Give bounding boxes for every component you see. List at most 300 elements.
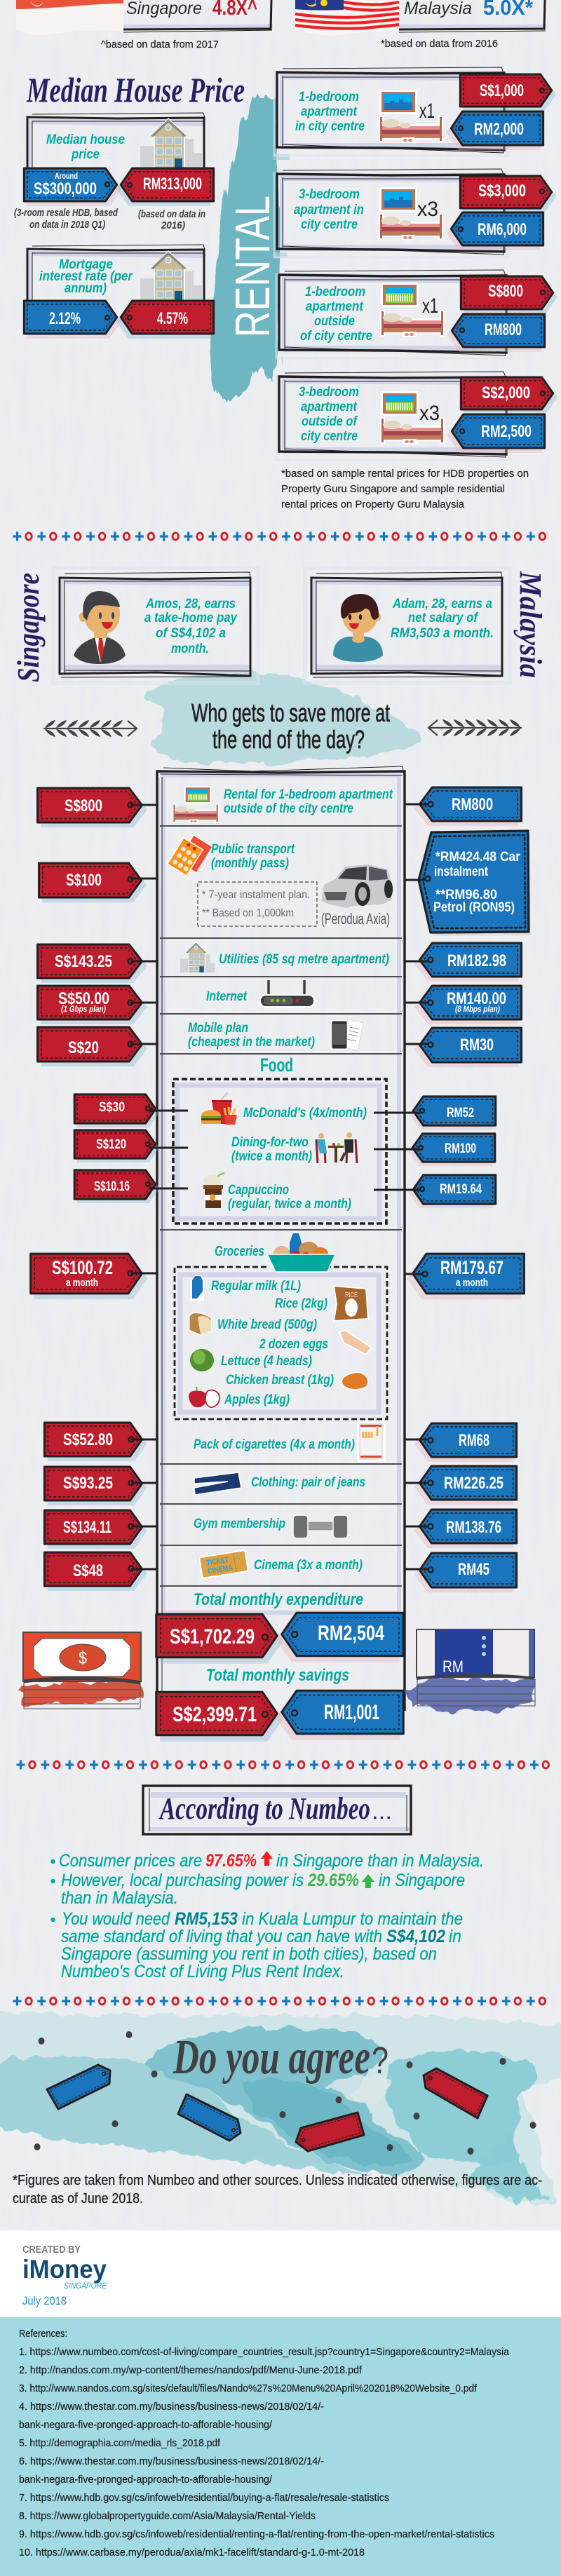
note: HDB source: (3-room resale HDB, based (14, 207, 119, 219)
text: Amos salary (144, 597, 238, 656)
label: Mortgage (59, 257, 113, 272)
text: cappuccino (228, 1183, 351, 1212)
icon: Amos avatar (74, 591, 126, 664)
icon: red tag one (296, 2113, 364, 2151)
label: Median house (46, 133, 125, 147)
tag: Malaysia rate (116, 301, 214, 339)
label: in city centre (295, 119, 365, 134)
tag: Malaysia rent (447, 414, 545, 453)
tag: S$143.25 (38, 944, 156, 983)
tag: RM226.25 (405, 1466, 517, 1505)
heading: do you agree: Do you agree (173, 2031, 370, 2084)
tag: S$100.72: a month (66, 1277, 98, 1289)
panel: references: 1. https://www.numbeo.com/cost-of-living/compare_countries_result.jsp?country1=Singapore&country2=Malaysia (19, 2346, 510, 2358)
tag: S$93.25 (44, 1467, 156, 1505)
tag: Singapore total expenditure (156, 1614, 283, 1664)
heading: rental: RENTAL (225, 196, 280, 337)
tag: S$800: S$800 (65, 796, 102, 815)
label: outside (314, 314, 355, 329)
tag: Malaysia rent (447, 111, 543, 150)
tag: Singapore rent: S$3,000 (478, 182, 526, 201)
bullet 2 (50, 1871, 465, 1908)
panel: references: bank-negara-five-pronged-approach-to-afforable-housing/ (19, 2419, 273, 2431)
item: apples (189, 1387, 290, 1407)
row: cinema (44, 1550, 517, 1592)
bullet 3: same standard of living that you can have with (61, 1927, 382, 1946)
icon: window and bed (380, 391, 445, 445)
note box: instalment and petrol basis: * 7-year instalment plan. (202, 889, 310, 901)
tag: RM138.76: RM138.76 (446, 1518, 501, 1537)
row: internet (38, 980, 522, 1024)
icon: window and bed (379, 90, 443, 143)
tag: RM100: RM100 (445, 1141, 476, 1156)
tag: RM19.64 (374, 1175, 496, 1208)
label (299, 385, 359, 444)
panel: references (0, 2317, 561, 2576)
panel: references: 4. https://www.thestar.com.my/business/business-news/2018/02/14/- (19, 2401, 324, 2413)
panel: references: References: (19, 2328, 67, 2340)
icon: Singapore banknote and wallet: $ (79, 1648, 87, 1668)
tag: S$10.16: S$10.16 (94, 1179, 130, 1194)
credit: created by iMoney: July 2018 (22, 2294, 67, 2307)
tag: Singapore price: Around (55, 171, 78, 181)
label: apartment in (294, 203, 364, 217)
item: eggs (259, 1330, 372, 1355)
row: cappuccino (74, 1170, 496, 1212)
label (295, 90, 365, 134)
icon: window and bed (380, 283, 445, 337)
row: mobile plan (38, 1019, 522, 1067)
tag: RM19.64: RM19.64 (440, 1182, 482, 1197)
text: utilities: Utilities (85 sq metre apartment) (219, 952, 389, 967)
tag: S$30: S$30 (99, 1100, 125, 1115)
note: HDB source (14, 207, 119, 231)
footnote: curate as of June 2018. (13, 2191, 143, 2206)
bullet 2: in Singapore (379, 1871, 465, 1890)
panel: food items (74, 1079, 496, 1223)
item: bread: White bread (500g) (217, 1317, 317, 1332)
icon: house (140, 250, 202, 301)
tag: S$134.11: S$134.11 (63, 1518, 111, 1537)
tag: Malaysia price (116, 168, 214, 206)
text: cigarettes: Pack of cigarettes (4x a month) (194, 1437, 355, 1452)
text: public transport (211, 842, 295, 871)
tag: S$48: S$48 (73, 1561, 103, 1580)
tag: Singapore price: S$300,000 (34, 179, 97, 198)
panel: references: 2. http://nandos.com.my/wp-content/themes/nandos/pdf/Menu-June-2018.pdf (19, 2364, 363, 2376)
tag: Singapore rent (461, 377, 557, 414)
tag: S$52.80: S$52.80 (63, 1430, 113, 1449)
note: Malaysia source (138, 208, 205, 231)
tag: Singapore rate (24, 301, 121, 339)
bullet 3 (50, 1909, 463, 1981)
panel: Adam (305, 568, 510, 683)
text: rental: outside of the city centre (224, 801, 353, 816)
icon: car (321, 865, 393, 908)
tag: Malaysia total savings: RM1,001 (324, 1701, 379, 1724)
tag: RM800 (405, 787, 522, 826)
row: cigarettes (44, 1421, 517, 1462)
tag: Malaysia rent: RM2,500 (481, 422, 532, 441)
text: rental: Rental for 1-bedroom apartment (224, 787, 393, 802)
text: jeans: Clothing: pair of jeans (251, 1475, 365, 1490)
note box: instalment and petrol basis (198, 882, 317, 926)
panel: references: 10. https://www.carbase.my/perodua/axia/mk1-facelift/standard-g-1.0-mt-2018 (19, 2547, 365, 2558)
decorative teal blob behind question (145, 672, 419, 764)
label: price (71, 147, 100, 162)
tag: Singapore rate: 2.12% (49, 309, 81, 328)
icon: fast food (201, 1092, 237, 1125)
tag: Malaysia total expenditure: RM2,504 (318, 1622, 384, 1645)
tag: RM138.76 (405, 1510, 517, 1548)
heading: do you agree: ? (372, 2040, 388, 2082)
panel: references: 8. https://www.globalpropertyguide.com/Asia/Malaysia/Rental-Yields (19, 2510, 316, 2522)
icon: left laurel arrow (43, 720, 137, 737)
panel: Singapore price-to-income (16, 0, 272, 35)
credit: created by iMoney (22, 2244, 107, 2307)
tag: RM179.67: a month (456, 1277, 488, 1289)
icon: cigarette pack (357, 1421, 386, 1462)
tag: Singapore rent (461, 276, 557, 314)
label (39, 257, 133, 296)
note: Malaysia source: 2016) (161, 219, 185, 231)
label: apartment (306, 299, 364, 314)
caption: car model: (Perodua Axia) (321, 910, 390, 928)
tag: car and petrol: instalment (434, 865, 489, 879)
tag: S$48 (44, 1552, 156, 1591)
text: Amos salary: of S$4,102 a (156, 626, 226, 641)
tag: Singapore rent (460, 176, 556, 213)
bullet 1: 97.65% (205, 1851, 257, 1871)
icon: dumbbell (293, 1515, 348, 1538)
panel: references: 6. https://www.thestar.com.my/business/business-news/2018/02/14/- (19, 2455, 324, 2467)
text: Adam salary: RM3,503 a month. (391, 626, 494, 641)
tag: Singapore rent: S$2,000 (482, 384, 530, 402)
tag: RM45: RM45 (458, 1560, 489, 1579)
tag: RM182.98 (405, 943, 522, 982)
bullet 1 (50, 1851, 484, 1871)
icon: cinema ticket: CINEMA (207, 1564, 234, 1576)
tag: RM68: RM68 (459, 1431, 489, 1450)
icon: coffee cup (203, 1173, 224, 1208)
note: rental sources: Property Guru Singapore and sample residential (281, 483, 505, 495)
heading: median house price: Median House Price (26, 70, 245, 109)
icon: Singapore banknote and wallet (15, 1632, 144, 1709)
tag: S$50.00: (1 Gbps plan) (61, 1004, 106, 1014)
panel: main comparison column (157, 766, 405, 1711)
label: 1-bedroom (299, 90, 359, 104)
icon: grocery basket (267, 1233, 335, 1272)
divider pattern (16, 1758, 551, 1772)
tag: S$100.72: S$100.72 (52, 1257, 113, 1278)
row: utilities (38, 942, 522, 983)
label: annum) (65, 281, 107, 296)
row dividers (160, 826, 402, 1586)
tag: S$30 (74, 1094, 188, 1127)
tag: Malaysia rent: RM800 (485, 320, 522, 339)
panel: references: bank-negara-five-pronged-approach-to-afforable-housing/ (19, 2474, 273, 2486)
tag: Malaysia total savings (276, 1690, 403, 1740)
text: Amos salary: Amos, 28, earns (145, 597, 236, 611)
icon: blue tag two (178, 2094, 241, 2141)
tag: Malaysia rent (447, 212, 543, 250)
note: HDB source: on data in 2018 Q1) (29, 219, 105, 231)
panel: Malaysia price-to-income (295, 0, 546, 36)
text: Amos salary: month. (171, 642, 209, 656)
tag: S$50.00: S$50.00 (58, 989, 109, 1008)
tag: S$20 (38, 1027, 156, 1066)
tag: Malaysia price: RM313,000 (143, 175, 202, 194)
icon: phone and bill (332, 1019, 363, 1050)
icon: cinema ticket: TICKET (206, 1556, 229, 1568)
note: Malaysia data year: *based on data from 2016 (381, 38, 498, 50)
tag: RM179.67: RM179.67 (440, 1257, 503, 1278)
heading: total monthly savings: Total monthly savings (206, 1666, 349, 1685)
tag: RM100 (374, 1134, 495, 1166)
text: cappuccino: (regular, twice a month) (228, 1197, 351, 1212)
heading: food: Food (260, 1055, 293, 1076)
heading: who gets to save more: the end of the day? (212, 725, 365, 754)
tag: S$800 (38, 788, 156, 827)
tag: S$52.80 (44, 1423, 156, 1461)
panel: references: 3. http://www.nandos.com.sg/sites/default/files/Nando%27s%20Menu%20April%202018%20Website_0.pdf (19, 2382, 478, 2394)
icon: window and bed (173, 786, 219, 823)
tag: RM52 (374, 1097, 496, 1130)
decorative watercolour band (0, 2011, 561, 2202)
panel: references: 9. https://www.hdb.gov.sg/cs/infoweb/residential/renting-a-flat/renting-from-the-open-market/rental-statistics (19, 2528, 494, 2540)
text: rental (224, 787, 393, 816)
tag: Singapore rent: S$800 (488, 282, 523, 301)
tag: S$100 (39, 863, 156, 902)
heading box: According to Numbeo: ... (372, 1801, 392, 1824)
tag: RM800: RM800 (452, 795, 493, 814)
text: dining-for-two: Dining-for-two (231, 1135, 309, 1150)
heading: total monthly expenditure: Total monthly expenditure (194, 1590, 363, 1609)
text block: Numbeo findings (50, 1851, 484, 1981)
bullet 2: than in Malaysia. (61, 1888, 178, 1908)
decorative dots (34, 2031, 536, 2155)
tag: Singapore price (24, 168, 121, 206)
tag: S$120 (74, 1130, 188, 1162)
tag: RM68 (405, 1423, 517, 1462)
heading: who gets to save more: Who gets to save more at (191, 698, 390, 727)
label: interest rate (per (39, 269, 133, 284)
credit: created by iMoney: CREATED BY (22, 2244, 81, 2256)
text: Amos salary: a take-home pay (144, 611, 238, 625)
text: dining-for-two: (twice a month) (231, 1149, 312, 1164)
panel: Amos (53, 568, 258, 683)
label: apartment (301, 104, 358, 119)
row: dining-for-two (74, 1130, 495, 1166)
bullet 3: in Kuala Lumpur to maintain the (242, 1909, 463, 1929)
label: of city centre (300, 329, 372, 344)
bullet 3: in (449, 1927, 461, 1946)
item: eggs: 2 dozen eggs (259, 1337, 328, 1352)
note: rental sources (281, 468, 529, 510)
label: outside of (302, 414, 358, 429)
text: cinema: Cinema (3x a month) (254, 1558, 363, 1573)
bullet 3: Singapore (assuming you rent in both cities), based on (61, 1944, 437, 1964)
note: rental sources: *based on sample rental prices for HDB properties on (281, 468, 529, 480)
label (300, 285, 372, 344)
heading: who gets to save more (191, 698, 390, 754)
panel: rental 3-bedroom city (274, 169, 556, 257)
icon: diners (316, 1132, 357, 1163)
bullet 2: 29.65% (307, 1871, 359, 1890)
tag: S$50.00 (38, 986, 156, 1024)
text: Adam salary: Adam, 28, earns a (392, 597, 492, 611)
tag: S$10.16 (74, 1170, 188, 1203)
icon: blue tag one (47, 2065, 110, 2109)
icon: router (259, 980, 316, 1008)
bullet 1: in Singapore than in Malaysia. (276, 1851, 484, 1871)
bullet 2: However, local purchasing power is (61, 1871, 304, 1890)
text: mobile plan (188, 1021, 315, 1050)
row: jeans (44, 1466, 517, 1505)
tag: Malaysia total expenditure (276, 1613, 403, 1662)
label: Singapore vertical: Singapore (11, 573, 46, 682)
row: public transport (39, 831, 531, 936)
text: Adam salary (391, 597, 494, 641)
icon: transport tickets (168, 835, 212, 876)
divider pattern (13, 529, 548, 543)
tag: RM45 (405, 1553, 517, 1592)
text: mobile plan: (cheapest in the market) (188, 1035, 315, 1050)
panel: references: 7. https://www.hdb.gov.sg/cs/infoweb/residential/buying-a-flat/resale/resale-statistics (19, 2492, 389, 2504)
text: McDonald's: McDonald's (4x/month) (243, 1106, 367, 1120)
label: Malaysia vertical: Malaysia (513, 571, 548, 678)
divider pattern (13, 1994, 548, 2008)
bullet 3: RM5,153 (175, 1909, 238, 1929)
item: lettuce (190, 1349, 312, 1371)
icon: red tag two (424, 2068, 487, 2118)
item: lettuce: Lettuce (4 heads) (221, 1354, 312, 1369)
text: mobile plan: Mobile plan (188, 1021, 248, 1036)
label: 3-bedroom (299, 187, 360, 202)
tag: RM140.00 (405, 986, 522, 1024)
icon: window and bed (379, 187, 443, 240)
label (46, 133, 125, 162)
tag: car and petrol: Petrol (RON95) (433, 900, 515, 915)
note box: instalment and petrol basis: ** Based on 1,000km (202, 907, 294, 919)
text: public transport: Public transport (211, 842, 295, 857)
icon: window and bed: x3 (419, 402, 440, 425)
tag: Singapore total savings: S$2,399.71 (173, 1703, 257, 1726)
tag: Singapore rent: S$1,000 (480, 81, 524, 100)
text: internet: Internet (206, 989, 248, 1004)
tag: Malaysia rent (447, 314, 545, 352)
bullet 3: S$4,102 (386, 1927, 445, 1946)
credit: created by iMoney: SINGAPORE (64, 2281, 107, 2291)
icon: right laurel arrow (428, 719, 522, 736)
label: city centre (301, 217, 358, 232)
item: rice (275, 1286, 368, 1321)
tag: S$20: S$20 (68, 1038, 99, 1057)
tag: Malaysia rent: RM2,000 (474, 120, 524, 139)
heading box: According to Numbeo (143, 1786, 411, 1834)
item: chicken: Chicken breast (1kg) (226, 1373, 334, 1388)
footnote (13, 2173, 542, 2206)
text: dining-for-two (231, 1135, 312, 1164)
tag: S$100: S$100 (66, 871, 102, 890)
row: gym (44, 1510, 517, 1549)
tag: S$93.25: S$93.25 (63, 1474, 113, 1493)
tag: RM182.98: RM182.98 (447, 951, 506, 970)
tag: S$134.11 (44, 1510, 156, 1549)
tag: Malaysia rate: 4.57% (157, 309, 188, 328)
item: rice: Rice (2kg) (275, 1296, 327, 1311)
tag: RM140.00: RM140.00 (447, 989, 506, 1008)
text: public transport: (monthly pass) (211, 856, 289, 871)
item: milk (190, 1275, 301, 1301)
heading box: According to Numbeo: According to Numbeo (158, 1791, 370, 1826)
label: 3-bedroom (299, 385, 359, 400)
tag: Singapore total savings (156, 1692, 283, 1742)
credit: created by iMoney: iMoney (22, 2255, 107, 2284)
tag: Malaysia rent: RM6,000 (478, 220, 527, 239)
decorative rental brush (210, 93, 290, 402)
tag: Singapore rent (460, 74, 556, 111)
text: Adam salary: net salary of (408, 611, 478, 625)
tag: Singapore total expenditure: S$1,702.29 (170, 1625, 255, 1648)
tag: car and petrol: **RM96.80 (435, 888, 497, 902)
text: cappuccino: Cappuccino (228, 1183, 289, 1198)
tag: RM52: RM52 (447, 1106, 474, 1120)
panel: median house price (24, 113, 214, 206)
note: rental sources: rental prices on Property Guru Malaysia (281, 499, 465, 510)
tag: RM179.67 (405, 1254, 524, 1299)
panel: rental 3-bedroom outside city (276, 372, 557, 460)
tag: S$143.25: S$143.25 (55, 952, 112, 971)
tag: RM140.00: (8 Mbps plan) (455, 1004, 500, 1014)
label (294, 187, 364, 232)
icon: house (180, 942, 215, 972)
tag: S$100.72 (31, 1254, 156, 1299)
footer white background (0, 2230, 561, 2317)
panel: references: 5. http://demographia.com/media_rls_2018.pdf (19, 2437, 221, 2449)
note: Malaysia source: (based on data in (138, 208, 205, 220)
tag: RM30: RM30 (460, 1036, 494, 1055)
tag: RM30 (405, 1028, 522, 1067)
tag: RM226.25: RM226.25 (444, 1474, 503, 1493)
item: bread (189, 1313, 317, 1335)
note: Singapore data year: ^based on data from 2017 (101, 39, 219, 50)
text: gym: Gym membership (194, 1517, 285, 1531)
tag: car and petrol (405, 831, 531, 936)
icon: cinema ticket (199, 1550, 248, 1578)
icon: jeans (194, 1472, 241, 1495)
icon: Adam avatar (333, 594, 383, 662)
label: 1-bedroom (305, 285, 365, 299)
label: apartment (301, 400, 358, 414)
icon: window and bed: x1 (422, 294, 438, 318)
tag: car and petrol: *RM424.48 Car (435, 850, 521, 865)
bullet 1: Consumer prices are (59, 1851, 202, 1871)
panel: mortgage interest rate (24, 245, 214, 339)
label: city centre (301, 429, 358, 444)
heading: groceries: Groceries (215, 1244, 264, 1259)
tag: S$120: S$120 (96, 1137, 126, 1152)
icon: window and bed: x1 (419, 100, 435, 123)
panel: groceries (31, 1233, 524, 1419)
item: milk: Regular milk (1L) (211, 1279, 301, 1294)
bullet 3: Numbeo's Cost of Living Plus Rent Index. (61, 1962, 344, 1981)
row: rental (38, 786, 522, 827)
bullet 3: You would need (62, 1909, 170, 1929)
item: apples: Apples (1kg) (224, 1392, 290, 1407)
icon: house (140, 118, 202, 168)
panel: rental 1-bedroom city (274, 67, 556, 156)
